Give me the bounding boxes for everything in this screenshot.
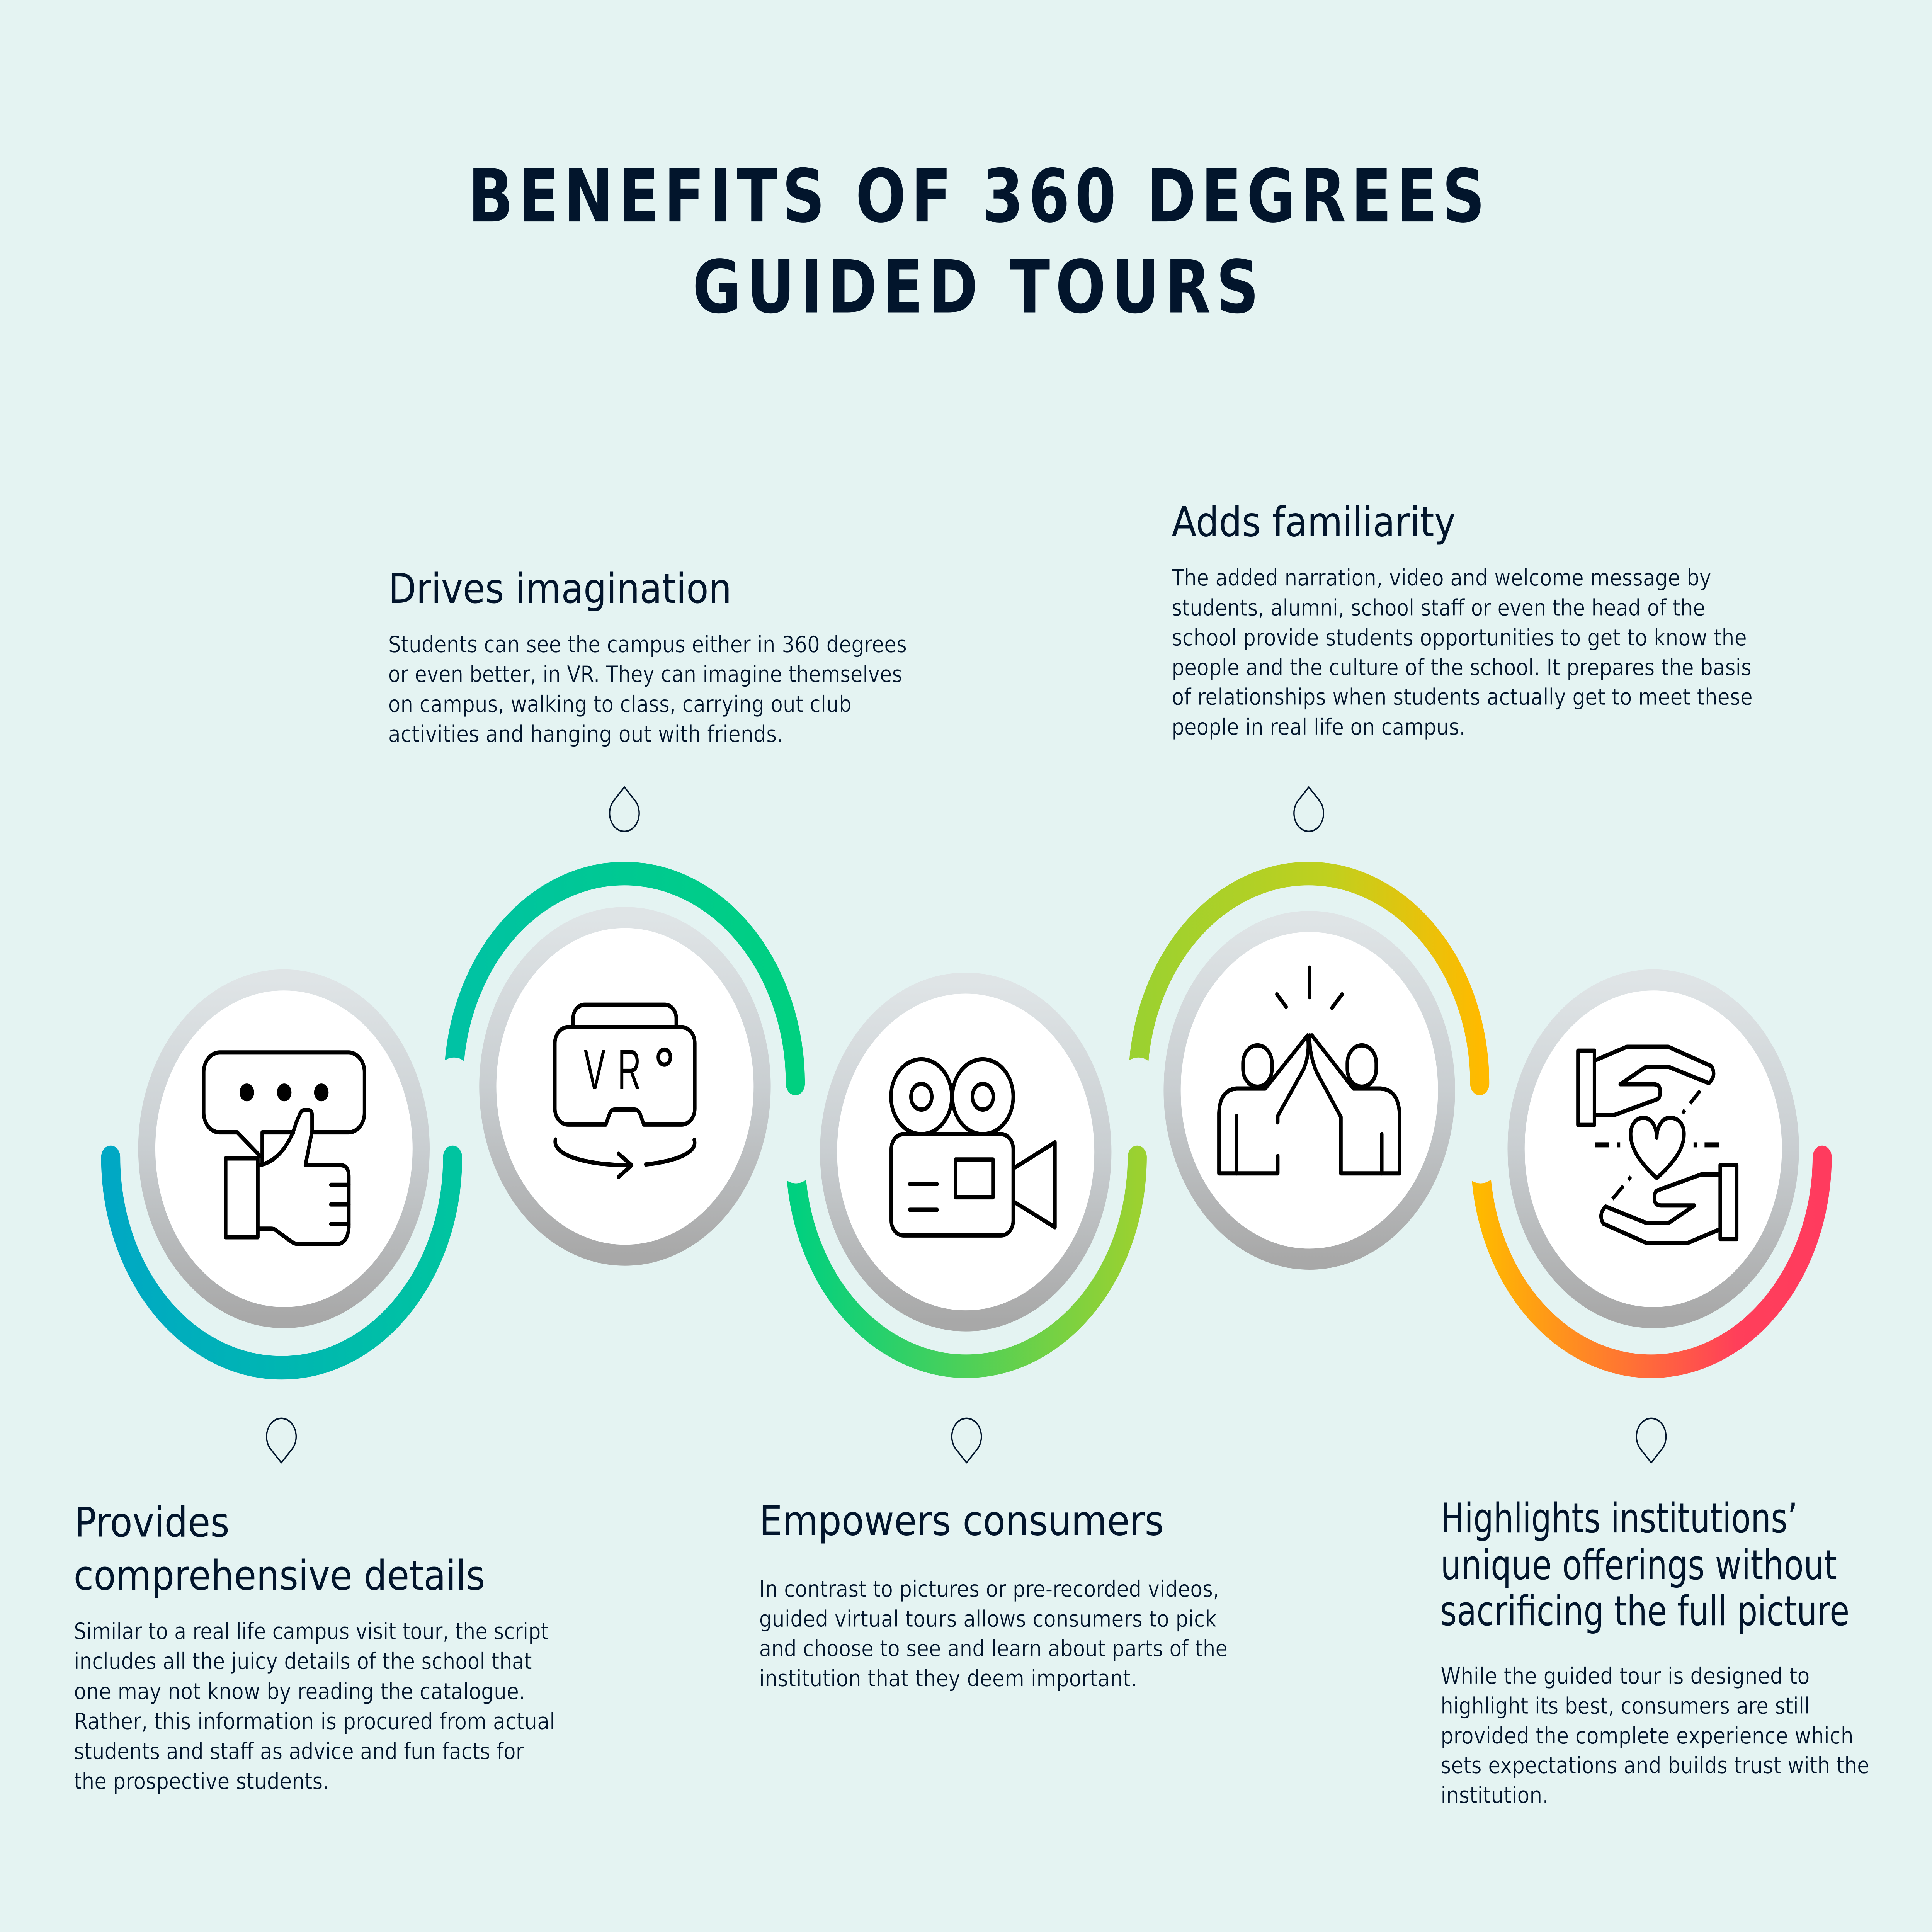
panel: circle 2 VR xyxy=(488,917,762,1255)
icon: drop marker 5 xyxy=(1636,1418,1666,1463)
panel: circle 1 thumbs up xyxy=(147,980,421,1318)
arc 3 xyxy=(777,1137,1137,1366)
text block: drives imagination xyxy=(388,631,907,747)
text block: highlights institutions: provided the complete experience which xyxy=(1440,1723,1854,1749)
heading: highlights institutions: sacrificing the full picture xyxy=(1440,1587,1849,1635)
text block: drives imagination: activities and hanging out with friends. xyxy=(388,721,783,747)
title: GUIDED TOURS xyxy=(692,245,1259,330)
heading: highlights institutions: Highlights institutions’ xyxy=(1440,1494,1798,1542)
panel: drives imagination text xyxy=(388,565,907,747)
text block: empowers consumers: and choose to see and learn about parts of the xyxy=(759,1635,1228,1662)
text block: highlights institutions: sets expectations and builds trust with the xyxy=(1440,1752,1869,1779)
text block: adds familiarity: of relationships when students actually get to meet these xyxy=(1172,684,1753,710)
heading: highlights institutions: unique offerings without xyxy=(1440,1541,1837,1589)
text block: adds familiarity: The added narration, video and welcome message by xyxy=(1171,565,1711,591)
panel: adds familiarity text xyxy=(1171,498,1753,740)
text block: adds familiarity xyxy=(1171,565,1753,740)
arc 2 xyxy=(435,874,795,1104)
panel: circle 3 camera xyxy=(828,983,1103,1321)
text block: empowers consumers: institution that they deem important. xyxy=(759,1665,1137,1692)
text block: provides comprehensive details xyxy=(74,1618,555,1794)
panel: circle 4 high five xyxy=(1172,922,1447,1259)
arc 1 xyxy=(111,1157,452,1368)
title: BENEFITS OF 360 DEGREES xyxy=(468,154,1485,239)
panel: provides comprehensive details text xyxy=(73,1498,555,1794)
icon: drop marker 1 xyxy=(267,1418,296,1463)
heading: highlights institutions xyxy=(1440,1494,1849,1635)
text block: empowers consumers xyxy=(759,1575,1228,1692)
icon: drop marker 4 xyxy=(1294,787,1323,832)
text block: adds familiarity: school provide students opportunities to get to know the xyxy=(1172,624,1747,651)
icon: drop marker 3 xyxy=(952,1418,981,1463)
text block: highlights institutions: While the guided tour is designed to xyxy=(1440,1663,1810,1689)
panel: circle 5 hands and heart xyxy=(1516,980,1791,1318)
panel: highlights institutions text xyxy=(1440,1494,1869,1808)
heading: empowers consumers: Empowers consumers xyxy=(759,1497,1164,1545)
arc 4 xyxy=(1119,874,1480,1104)
heading: adds familiarity: Adds familiarity xyxy=(1172,498,1456,546)
text block: highlights institutions: highlight its best, consumers are still xyxy=(1440,1692,1810,1719)
icon: speech bubble and thumbs up xyxy=(204,1053,364,1244)
icon: people high five xyxy=(1219,968,1400,1173)
text block: adds familiarity: students, alumni, school staff or even the head of the xyxy=(1172,594,1705,621)
heading: provides comprehensive details xyxy=(73,1498,485,1599)
text block: provides comprehensive details: one may not know by reading the catalogue. xyxy=(74,1678,525,1705)
text block: provides comprehensive details: Similar to a real life campus visit tour, the script xyxy=(74,1618,548,1645)
heading: drives imagination: Drives imagination xyxy=(388,565,731,612)
text block: empowers consumers: guided virtual tours allows consumers to pick xyxy=(759,1605,1217,1632)
icon: movie camera xyxy=(891,1059,1055,1235)
text block: provides comprehensive details: students and staff as advice and fun facts for xyxy=(74,1738,524,1765)
text block: drives imagination: Students can see the campus either in 360 degrees xyxy=(388,631,907,658)
heading: provides comprehensive details: comprehensive details xyxy=(73,1551,485,1599)
text block: provides comprehensive details: Rather, this information is procured from actual xyxy=(74,1708,555,1735)
icon: VR headset: VR xyxy=(584,1038,653,1102)
text block: empowers consumers: In contrast to pictures or pre-recorded videos, xyxy=(759,1575,1219,1602)
text block: provides comprehensive details: the prospective students. xyxy=(74,1768,329,1794)
text block: provides comprehensive details: includes all the juicy details of the school that xyxy=(74,1648,532,1675)
panel: empowers consumers text xyxy=(759,1497,1228,1692)
text block: adds familiarity: people and the culture of the school. It prepares the basis xyxy=(1172,654,1752,681)
title xyxy=(468,154,1485,330)
text block: adds familiarity: people in real life on campus. xyxy=(1172,714,1466,740)
icon: drop marker 2 xyxy=(610,787,639,832)
arc 5 xyxy=(1462,1137,1822,1366)
text block: highlights institutions xyxy=(1440,1663,1869,1808)
icon: hands holding heart xyxy=(1578,1047,1737,1243)
icon: VR headset xyxy=(555,1005,695,1177)
text block: drives imagination: on campus, walking to class, carrying out club xyxy=(388,690,852,718)
text block: drives imagination: or even better, in VR. They can imagine themselves xyxy=(388,661,902,687)
heading: provides comprehensive details: Provides xyxy=(74,1498,230,1546)
text block: highlights institutions: institution. xyxy=(1440,1782,1549,1808)
